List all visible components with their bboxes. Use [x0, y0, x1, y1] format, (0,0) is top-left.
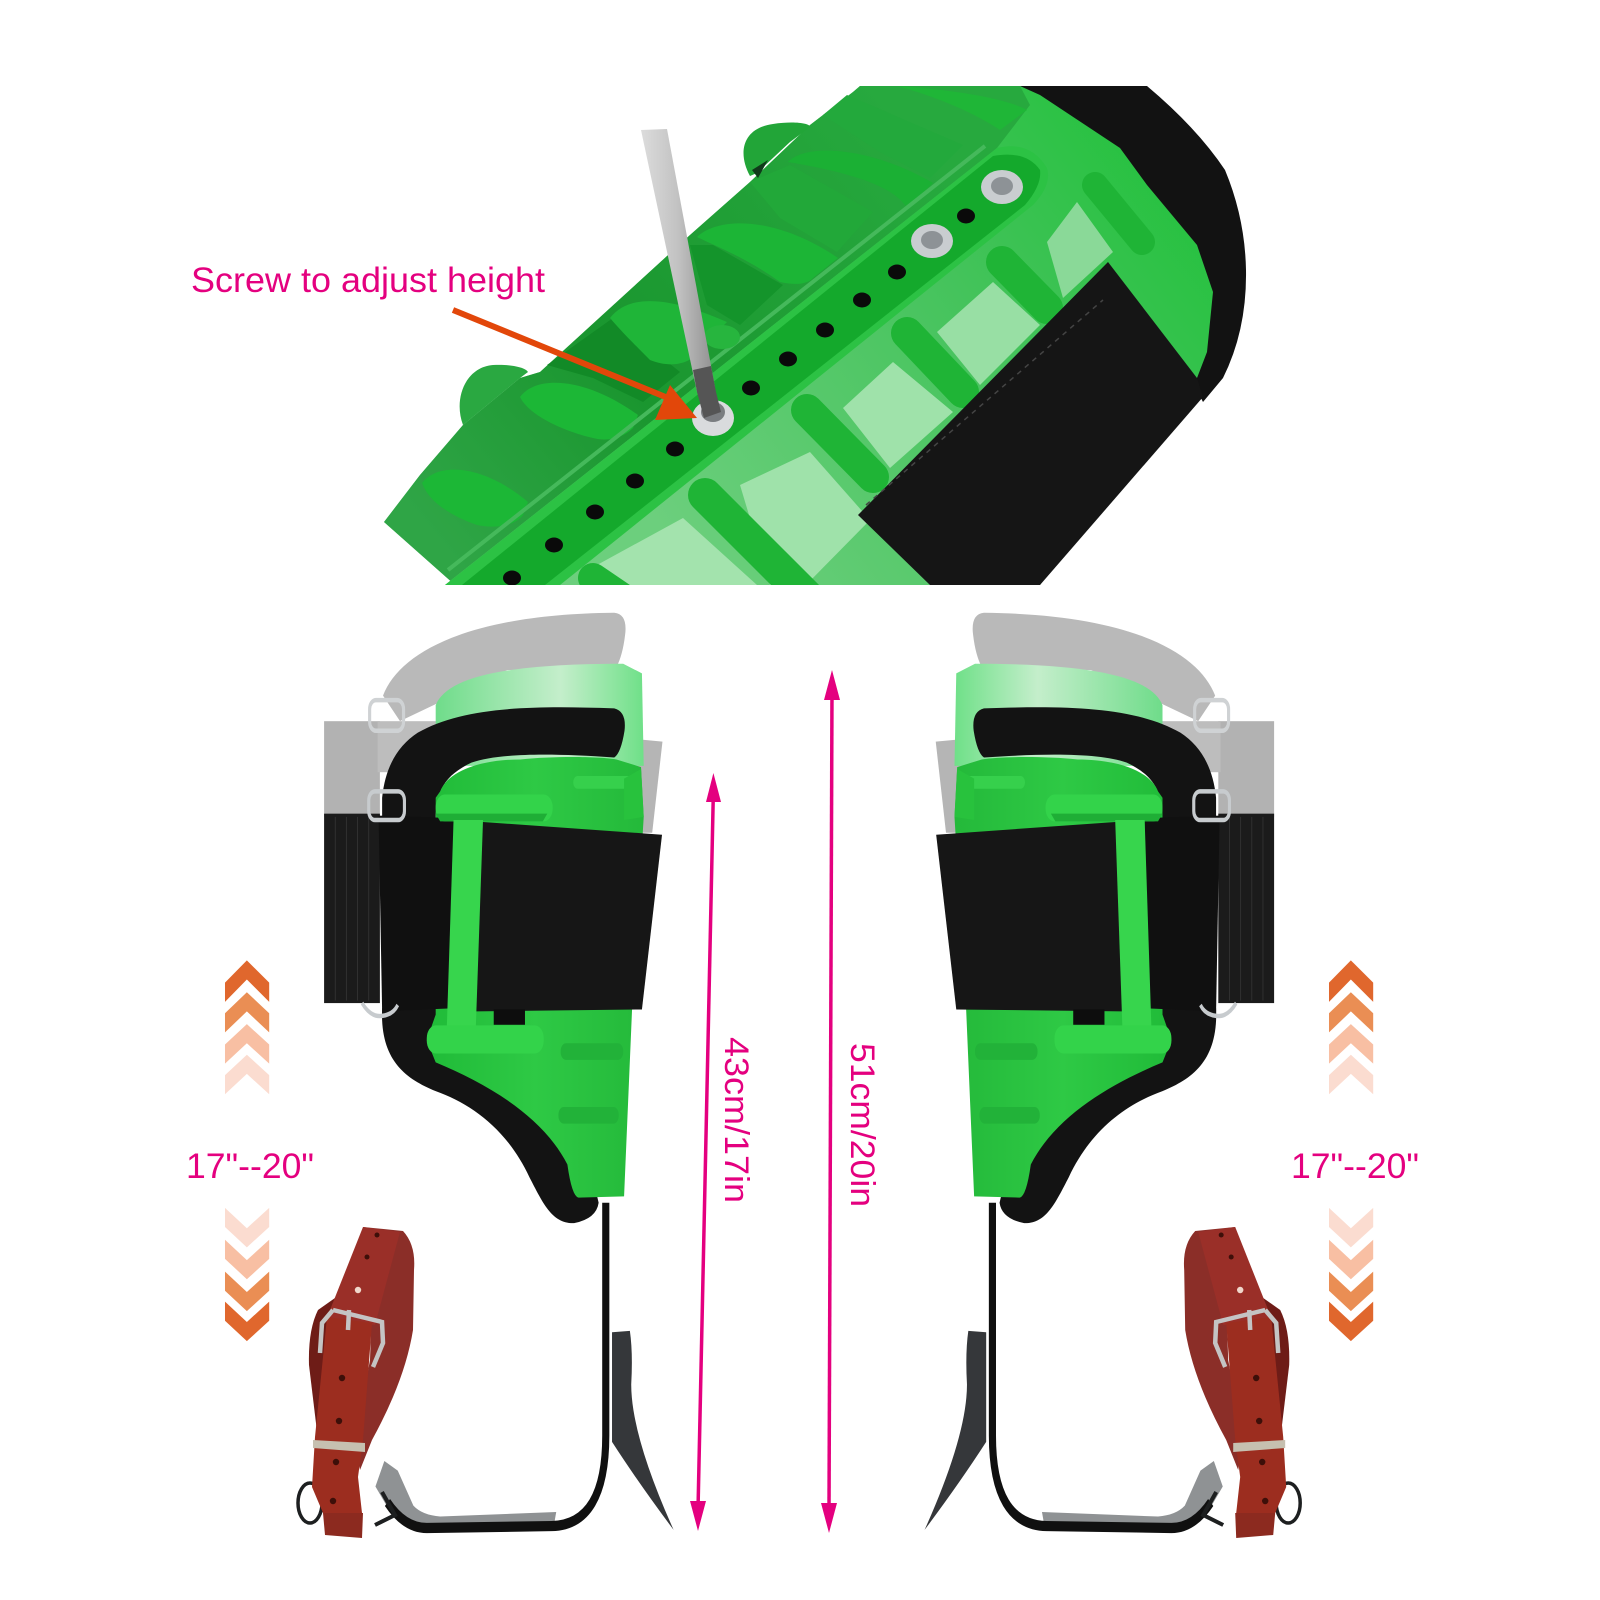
- label: right height range: 17"--20": [1291, 1147, 1419, 1186]
- title: screw label: Screw to adjust height: [191, 261, 545, 300]
- adjustment channel with holes: [445, 146, 1048, 586]
- hex key: [641, 129, 721, 418]
- illustration: right climbing gaff: [925, 613, 1300, 1538]
- black padding: [382, 707, 625, 1223]
- black back pad: [1020, 86, 1246, 402]
- chevrons: left upward: [225, 960, 269, 1094]
- holes: [503, 208, 975, 586]
- green T-bars: [427, 795, 553, 1053]
- straps: [324, 814, 662, 1011]
- chevrons: left downward: [225, 1208, 269, 1341]
- arrow: 43cm dimension: [690, 773, 721, 1531]
- ghost raised position: [324, 613, 662, 833]
- label: left height range: 17"--20": [186, 1147, 314, 1186]
- lower ribs: [593, 185, 1142, 610]
- panel: height adjustment close-up: [384, 86, 1246, 610]
- green shell: [384, 86, 1213, 585]
- illustration: left climbing gaff: [298, 613, 674, 1538]
- label: 51cm/20in: 51cm/20in: [843, 1043, 881, 1207]
- gaff spike: [612, 1331, 674, 1530]
- ridged upper side of the shell: [384, 86, 1030, 585]
- screws: [692, 170, 1023, 436]
- green shell: [427, 757, 644, 1198]
- label: 43cm/17in: 43cm/17in: [717, 1037, 755, 1203]
- arrow: 51cm dimension: [821, 670, 840, 1533]
- leather strap: [298, 1227, 414, 1538]
- buckle: [313, 1310, 383, 1452]
- arrow: points to adjusting screw: [453, 310, 697, 420]
- chevrons: right upward: [1329, 960, 1373, 1094]
- velcro strap: [858, 262, 1203, 585]
- chevrons: right downward: [1329, 1208, 1373, 1341]
- light panels between the ribs: [597, 202, 1113, 585]
- D-rings: [362, 791, 404, 1016]
- spike shank and stirrup: [375, 1203, 606, 1528]
